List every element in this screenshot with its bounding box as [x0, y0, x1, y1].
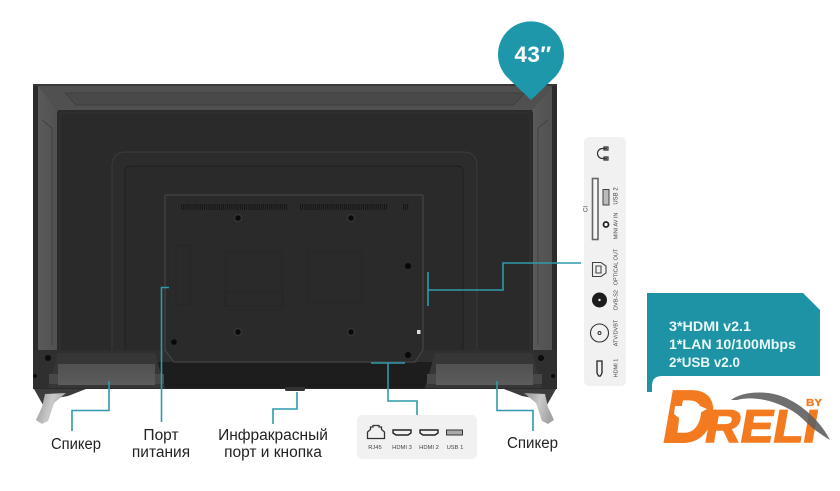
spec text — [669, 319, 796, 370]
icon: USB 2 port — [603, 190, 609, 205]
connector lines — [72, 263, 581, 431]
icon: headphone jack — [598, 147, 608, 160]
icon: USB 1 — [446, 430, 462, 435]
label: left speaker: Спикер — [51, 436, 101, 453]
line: right speaker — [497, 381, 533, 431]
label: DVB-S2: DVB-S2 — [614, 290, 620, 310]
logo swoosh — [731, 392, 830, 440]
bottom corners — [33, 350, 557, 388]
vesa screws — [234, 214, 354, 336]
IR button — [285, 387, 305, 391]
label: HDMI 1: HDMI 1 — [614, 359, 620, 377]
label: IR port and button: порт и кнопка — [224, 444, 322, 461]
size badge 43 inch — [498, 21, 564, 100]
logo Dreli — [657, 375, 830, 458]
vents — [181, 204, 409, 210]
logo BY: BY — [806, 397, 822, 409]
logo drill icon — [674, 406, 707, 431]
icon: RJ45 — [368, 426, 384, 438]
icon: optical out — [592, 262, 606, 276]
spec text: 3*HDMI v2.1 — [669, 319, 752, 334]
icon: mini AV — [604, 222, 608, 227]
central connector block — [165, 195, 423, 362]
label: USB 2: USB 2 — [614, 187, 620, 205]
label: power port: питания — [132, 444, 190, 461]
label: HDMI 3: HDMI 3 — [392, 445, 412, 451]
label: HDMI 2: HDMI 2 — [419, 445, 439, 451]
outer body — [33, 84, 557, 389]
line: left speaker — [72, 381, 109, 431]
icon: ATV/DVBT — [590, 324, 608, 342]
main back panel — [57, 110, 533, 388]
left speaker — [48, 353, 165, 388]
icon: HDMI 3 — [393, 430, 411, 435]
label: power port: Порт — [143, 427, 179, 444]
icon: HDMI 2 — [420, 430, 438, 435]
label: right speaker: Спикер — [507, 435, 558, 452]
label: optical out: OPTICAL OUT — [614, 248, 620, 285]
label: RJ45: RJ45 — [368, 445, 382, 451]
icon: HDMI 1 — [597, 361, 602, 376]
label: IR port and button: Инфракрасный — [218, 427, 328, 444]
label: MINI AV IN: MINI AV IN — [614, 213, 620, 239]
icon: CI slot — [592, 178, 598, 240]
logo letters RELI: RELI — [701, 400, 822, 452]
right speaker — [425, 353, 542, 388]
tv back — [33, 84, 557, 424]
logo letter D: D — [657, 375, 722, 458]
sticker marks — [176, 245, 362, 310]
icon: DVB-S2 — [592, 292, 607, 308]
screws on corners — [33, 355, 555, 378]
right stand — [504, 389, 556, 424]
line: bottom connectors — [371, 363, 417, 415]
label: CI: CI — [584, 206, 590, 212]
line: power port — [162, 288, 169, 422]
left stand — [34, 389, 86, 424]
label: USB 1: USB 1 — [447, 445, 463, 451]
spec panel — [647, 293, 820, 392]
label: ATV/DVBT: ATV/DVBT — [614, 319, 620, 346]
stepped frames — [112, 152, 477, 350]
spec text: 2*USB v2.0 — [669, 355, 740, 370]
size badge 43 inch: 43″ — [514, 42, 552, 67]
line: ir port — [273, 392, 297, 424]
side connector panel — [584, 137, 626, 386]
line: side connectors — [428, 263, 581, 306]
bottom connector panel — [357, 415, 477, 459]
spec text: 1*LAN 10/100Mbps — [669, 337, 796, 352]
